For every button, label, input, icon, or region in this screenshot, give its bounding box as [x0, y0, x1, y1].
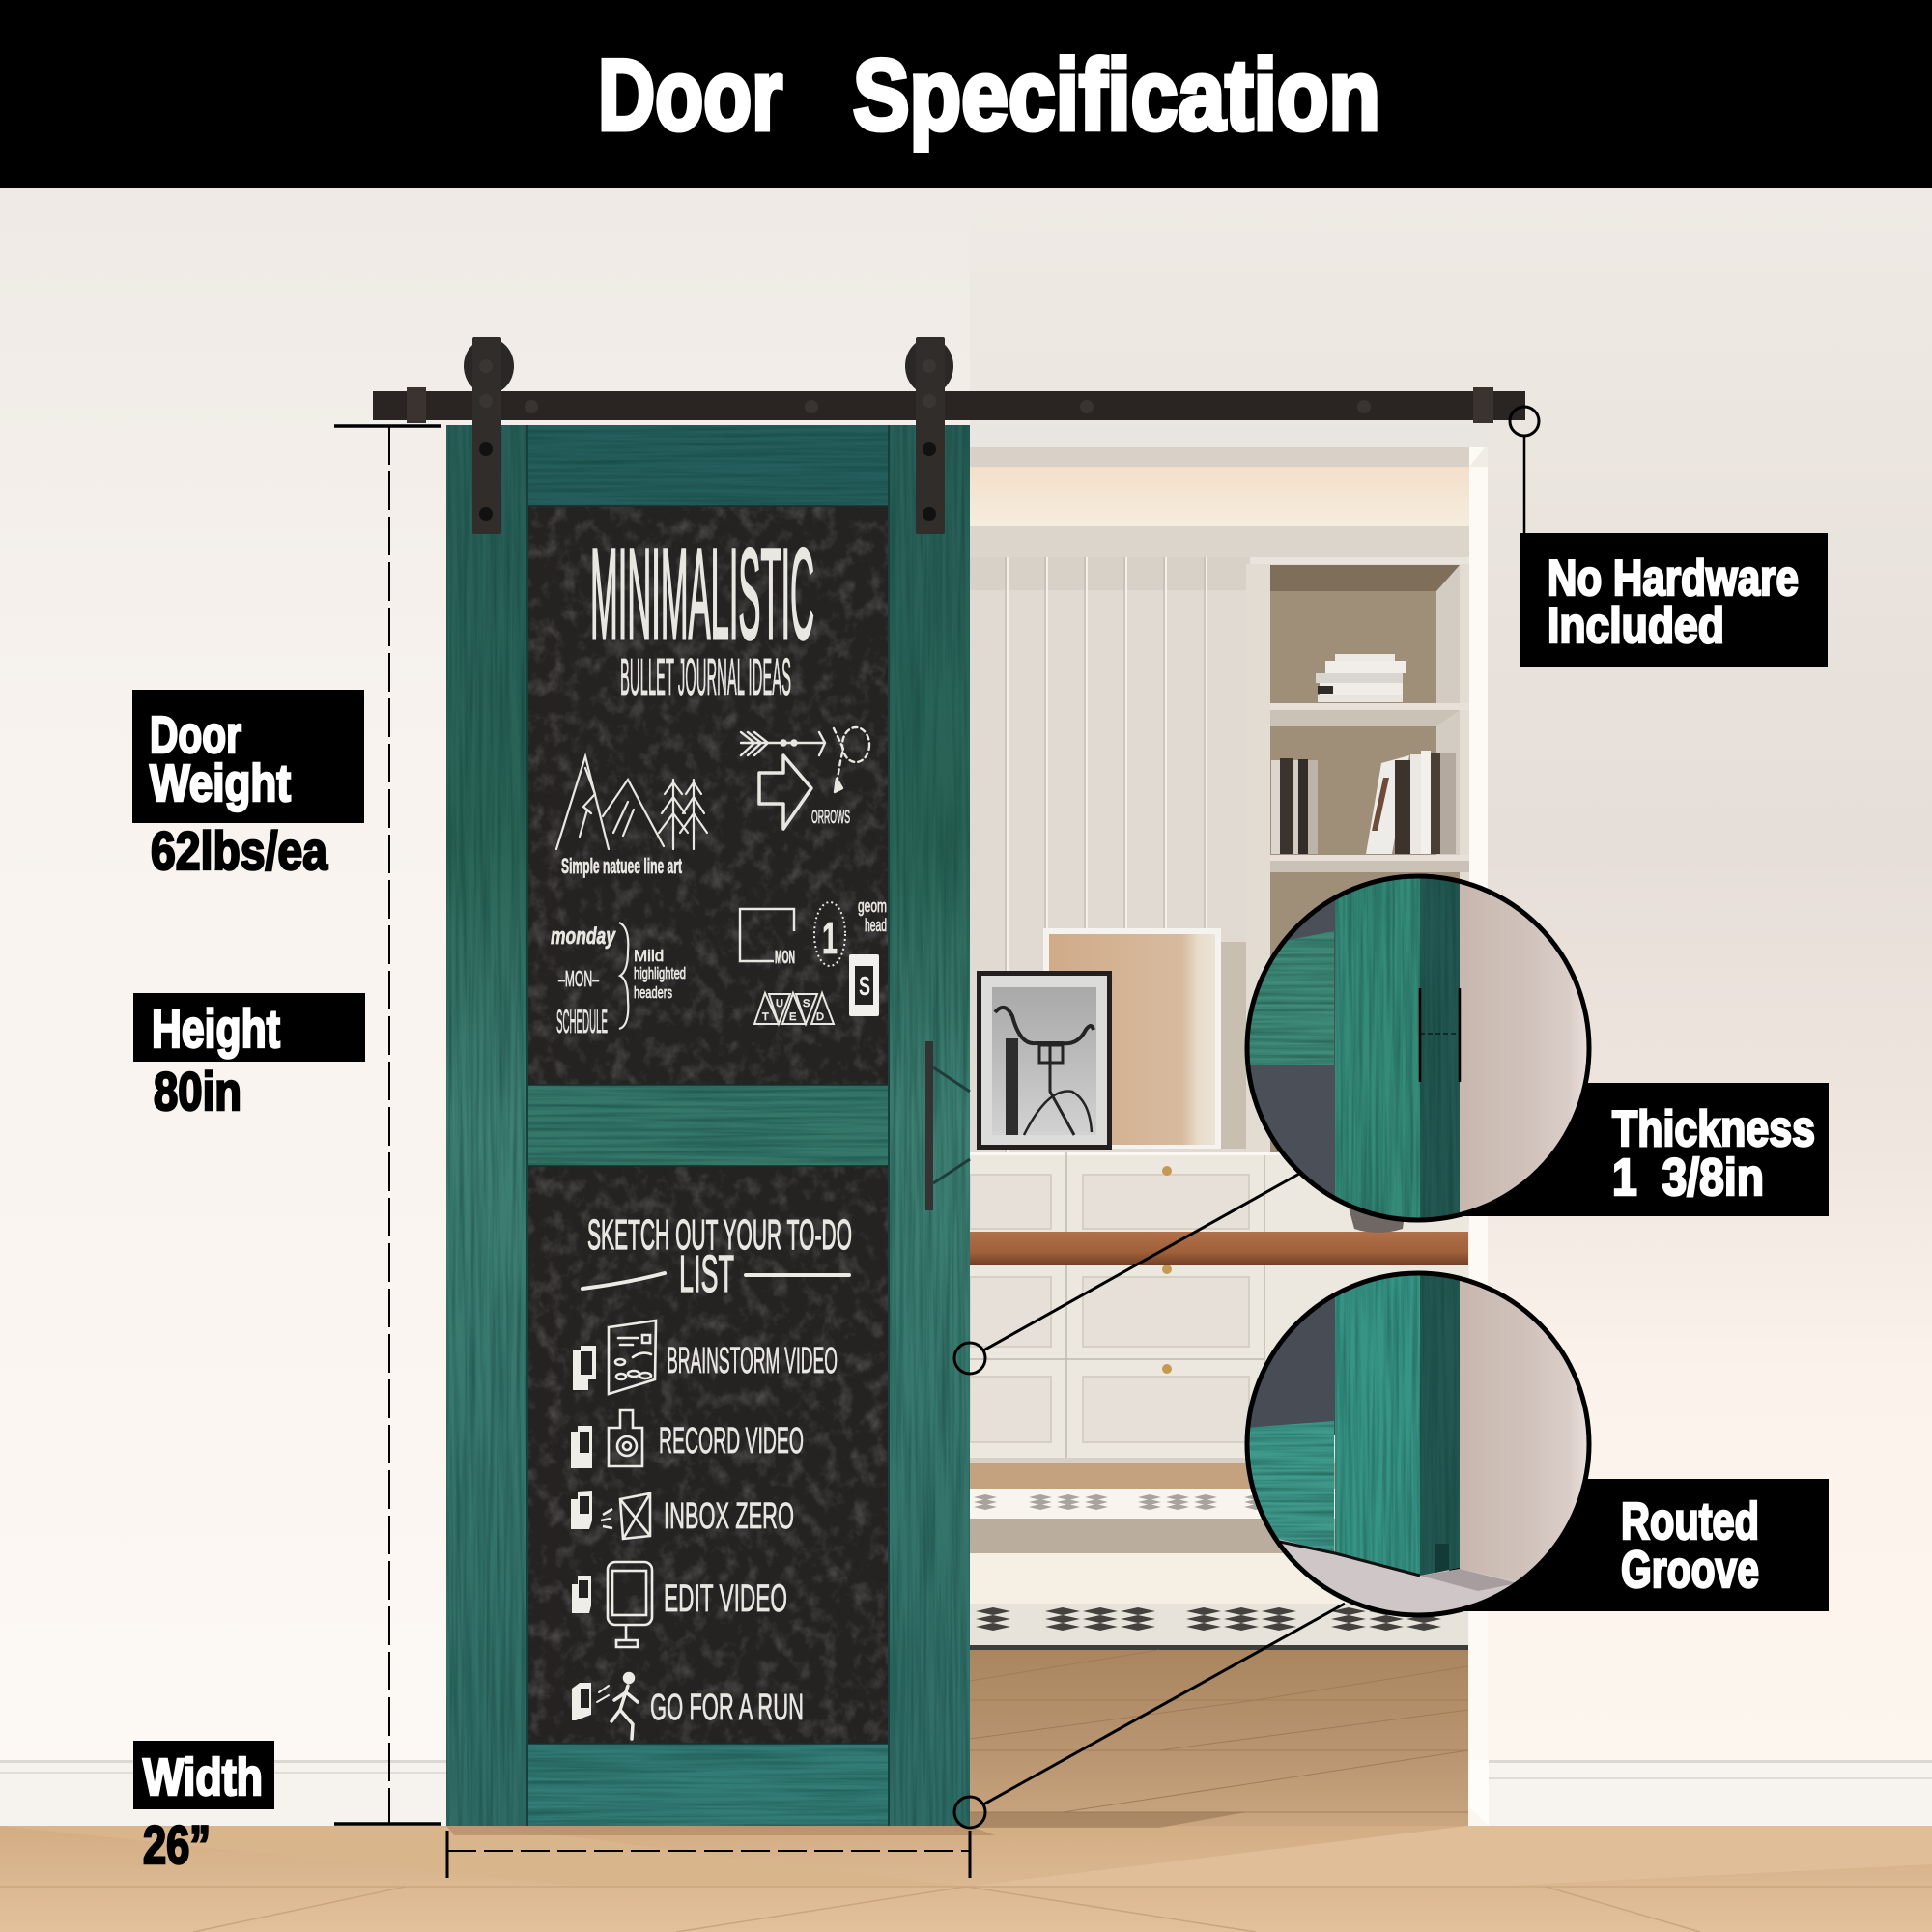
left hanger	[464, 337, 514, 534]
sketch: tuesday bunting	[754, 993, 834, 1024]
door opening frame	[970, 425, 1489, 1826]
rail bolts	[525, 400, 1371, 413]
width dimension line	[447, 1831, 970, 1878]
label: width	[133, 1741, 274, 1875]
sketch: s tile: S	[859, 971, 870, 1001]
right stile	[889, 425, 970, 1826]
chalk art upper panel: SCHEDULE	[556, 1004, 608, 1040]
text: BULLET JOURNAL IDEAS	[620, 648, 791, 706]
sketch: box header	[740, 909, 794, 961]
title text: Specification	[853, 40, 1380, 152]
rug diamonds light	[974, 1494, 1323, 1510]
crown molding	[970, 526, 1469, 557]
ceiling band	[970, 447, 1488, 526]
chalk clipped note	[858, 896, 887, 935]
value: height: 80in	[154, 1061, 242, 1122]
chalk art upper panel	[551, 523, 887, 1040]
chalk item edit: EDIT VIDEO	[664, 1577, 787, 1620]
callout: no hardware included: Included	[1548, 598, 1724, 654]
middle rail	[528, 1085, 888, 1166]
label: height: Height	[152, 998, 280, 1059]
label box: routed groove: Groove	[1621, 1541, 1759, 1599]
label box: routed groove	[1449, 1479, 1829, 1611]
sketch: tuesday bunting: E	[789, 1011, 796, 1023]
room interior through the doorway	[970, 447, 1488, 1828]
sketch: dotted number circle: 1	[822, 913, 838, 963]
rug diamonds dark	[976, 1607, 1441, 1631]
chalk art lower panel	[571, 1211, 852, 1739]
bookcase	[1246, 564, 1469, 1155]
lower cabinets	[970, 1152, 1468, 1463]
bicycle	[995, 1008, 1094, 1135]
text: MINIMALISTIC	[590, 523, 814, 667]
label: door weight: Door	[150, 706, 242, 764]
chalk item run: GO FOR A RUN	[650, 1688, 804, 1728]
chalk word mon: –MON–	[558, 966, 599, 991]
sketch: camera	[609, 1410, 642, 1466]
sketch: tuesday bunting: D	[816, 1011, 824, 1023]
chalk item inbox: INBOX ZERO	[664, 1496, 794, 1537]
chalk word mon box: MON	[775, 948, 795, 967]
barn track hardware	[373, 337, 1525, 534]
label: door weight: Weight	[150, 754, 291, 812]
chalk note: headers	[634, 983, 672, 1002]
sketch: tuesday bunting: U	[776, 998, 783, 1009]
books right	[1366, 751, 1456, 854]
sketch: brainstorm card	[609, 1321, 656, 1394]
sketch: arrows	[741, 727, 869, 829]
value: width: 26”	[143, 1814, 211, 1875]
brass knobs	[1162, 1166, 1172, 1374]
value: door weight: 62lbs/ea	[151, 820, 328, 881]
title bar	[0, 0, 1932, 188]
front wood floor	[0, 1826, 1932, 1932]
chalk art lower panel: LIST	[679, 1245, 734, 1303]
sketch: tuesday bunting: S	[803, 998, 810, 1009]
top rail	[528, 425, 888, 506]
text: SKETCH OUT YOUR TO-DO	[587, 1211, 852, 1259]
books left	[1271, 758, 1318, 854]
door handle	[925, 1041, 970, 1210]
interior floor	[970, 1463, 1468, 1489]
title text: Door	[598, 40, 782, 152]
patterned rug	[970, 1489, 1468, 1650]
callout: no hardware included: No Hardware	[1548, 551, 1799, 607]
chalk underlines	[582, 1273, 849, 1289]
title text	[598, 40, 1380, 152]
callout: no hardware included	[1510, 407, 1828, 667]
sketch: dotted number circle	[814, 902, 845, 966]
label: height	[133, 993, 365, 1122]
leader lines to detail circles	[954, 1174, 1345, 1828]
right hanger	[905, 337, 953, 534]
chalk art lower panel: BRAINSTORM VIDEO	[667, 1341, 838, 1381]
chalk note: Mild	[634, 947, 664, 965]
sketch: mountains and trees	[556, 756, 707, 849]
checkboxes	[571, 1346, 596, 1720]
lower chalkboard panel	[528, 1166, 888, 1744]
label box: thickness: Thickness	[1612, 1101, 1815, 1157]
framed bicycle photo	[977, 971, 1112, 1150]
sketch: envelope	[601, 1493, 650, 1539]
books stack	[1316, 654, 1406, 702]
height dimension line	[334, 426, 441, 1824]
sketch: runner	[597, 1673, 638, 1739]
sketch: tuesday bunting: T	[762, 1011, 769, 1023]
label: door weight	[132, 690, 364, 881]
bottom rail	[528, 1744, 888, 1826]
label: width: Width	[143, 1748, 263, 1806]
detail circle: door thickness	[1244, 874, 1595, 1222]
wood countertop	[970, 1232, 1468, 1265]
label box: thickness	[1449, 1083, 1829, 1216]
chalk item record: RECORD VIDEO	[659, 1421, 804, 1462]
chalk clipped note: head	[865, 916, 887, 935]
baseboards	[0, 1760, 1932, 1826]
sketch: s tile	[849, 954, 879, 1016]
rail end stops	[407, 387, 1493, 423]
chalk note	[634, 947, 686, 1002]
detail circle: routed groove	[1244, 1271, 1595, 1623]
chalk note: highlighted	[634, 964, 686, 982]
barn door	[446, 425, 970, 1826]
speaker puck	[1349, 1208, 1406, 1233]
track rail	[373, 391, 1525, 420]
label box: thickness: 1 3/8in	[1612, 1149, 1764, 1207]
chalk caption nature: Simple natuee line art	[561, 854, 682, 878]
framed artwork	[1043, 928, 1246, 1149]
panelled wall	[970, 557, 1250, 1152]
chalk clipped note: geom	[858, 896, 887, 916]
chalk word monday: monday	[551, 923, 616, 950]
label box: routed groove: Routed	[1621, 1492, 1759, 1550]
interior herringbone floor	[970, 1650, 1468, 1828]
chalk art upper panel: ORROWS	[811, 808, 850, 828]
upper chalkboard panel	[528, 506, 888, 1085]
left stile	[446, 425, 527, 1826]
sketch: monitor	[608, 1562, 652, 1647]
chalk brace	[619, 923, 628, 1029]
